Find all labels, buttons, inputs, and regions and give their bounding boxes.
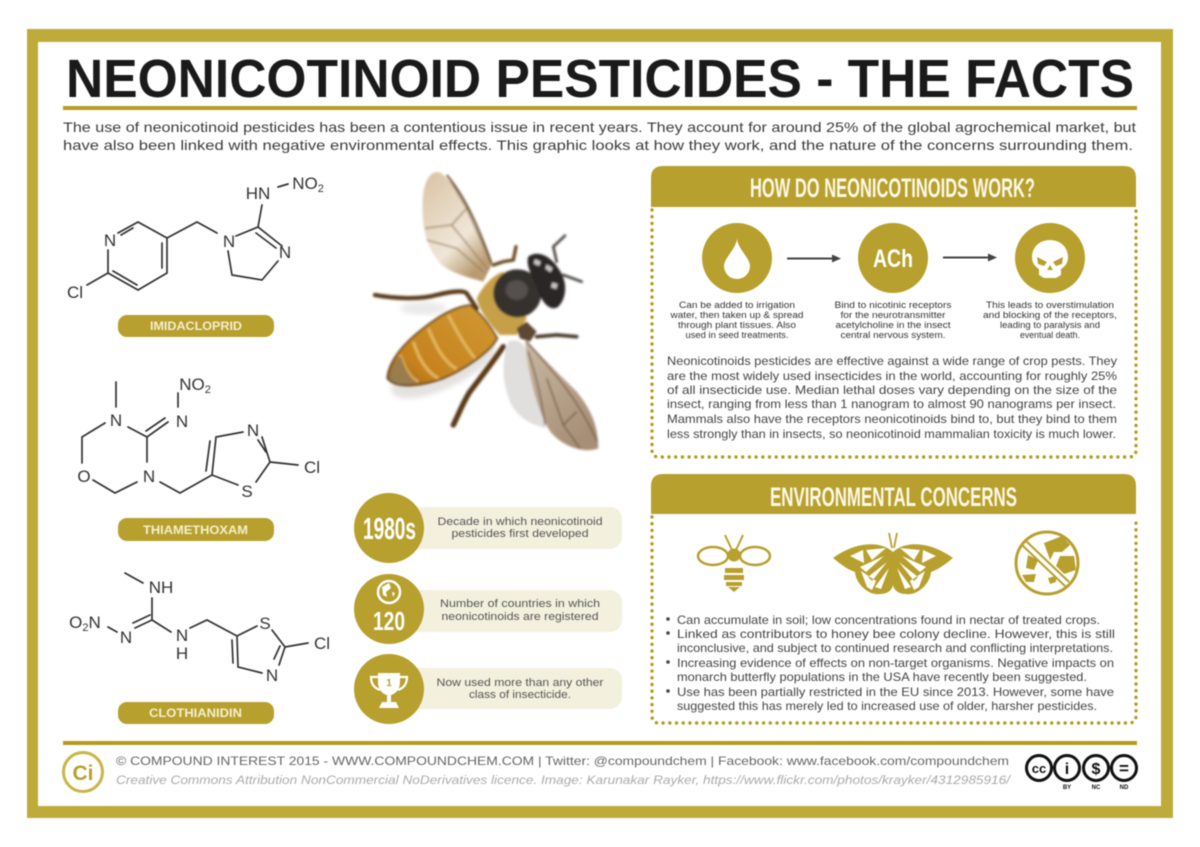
icon: skull [1015,223,1085,293]
logo: compound interest: Ci [72,762,94,785]
molecule: imidacloprid: NO [292,174,318,193]
creative commons icons: NC [1092,785,1101,791]
molecule: thiamethoxam: N [110,411,122,430]
stat: most used: class of insecticide. [469,689,571,701]
molecule: thiamethoxam: N [176,412,188,431]
bullet list: Can accumulate in soil; low concentrations found in nectar of treated crops. [677,613,1100,627]
footer credits: Creative Commons Attribution NonCommercial NoDerivatives licence. Image: Karunakar Rayker, https://www.flickr.com/photos/krayker/4312985916/ [116,773,1012,787]
molecule: imidacloprid: N [223,232,235,251]
molecule: thiamethoxam [77,375,320,501]
stat: 120 countries: Number of countries in which [440,598,600,610]
panel: environmental concerns [651,474,1136,723]
molecule: clothianidin: H [176,644,188,663]
caption 3: eventual death. [1020,330,1080,340]
arrow 2 [943,254,997,262]
stat: 120 countries [354,574,622,644]
molecule: clothianidin: N [266,666,278,685]
intro text: have also been linked with negative environmental effects. This graphic looks at how they work, and the nature of the concerns surrounding them. [63,137,1133,153]
arrow 1 [787,254,841,262]
stat: 1980s: pesticides first developed [452,528,588,540]
body paragraph: insect, ranging from less than 1 nanogram to almost 90 nanograms per insect. [667,397,1116,411]
bullet list: Increasing evidence of effects on non-target organisms. Negative impacts on [677,656,1114,670]
caption 3: and blocking of the receptors, [983,310,1117,320]
label: thiamethoxam [118,518,274,541]
molecule: imidacloprid: Cl [67,283,83,302]
body paragraph: Neonicotinoids pesticides are effective against a wide range of crop pests. They [667,354,1117,368]
bullet list: monarch butterfly populations in the USA have recently been suggested. [677,670,1087,684]
icon: ACh: ACh [873,245,913,273]
icon: water drop [702,223,772,293]
molecule: clothianidin: N [120,628,132,647]
molecule: clothianidin: N [89,613,101,632]
panel: how do neonicotinoids work [651,166,1136,457]
creative commons icons: $ [1092,761,1101,778]
panel header [651,166,1136,207]
panel header [651,474,1136,514]
label: clothianidin [118,702,274,724]
body paragraph: less strongly than in insects, so neonicotinoid mammalian toxicity is much lower. [667,427,1116,441]
molecule: thiamethoxam: 2 [205,384,211,396]
stat: most used: 1 [386,678,392,689]
footer rule [63,741,1137,745]
caption 1: Can be added to irrigation [679,300,795,310]
icon: globe prohibited [1016,532,1078,594]
creative commons icons [1026,756,1136,791]
bullet list: inconclusive, and subject to continued research and conflicting interpretations. [677,641,1113,655]
caption 3: leading to paralysis and [1000,320,1100,330]
creative commons icons: i [1065,761,1069,778]
molecule: clothianidin: 2 [82,622,89,634]
molecule: clothianidin: O [69,613,82,632]
footer credits [116,754,1012,787]
footer credits: © COMPOUND INTEREST 2015 - WWW.COMPOUNDCHEM.COM | Twitter: @compoundchem | Facebook: www.facebook.com/compoundchem [116,754,1009,768]
caption 2: acetylcholine in the insect [836,320,951,330]
body paragraph [667,354,1117,441]
logo: compound interest [64,752,102,792]
body paragraph: Mammals also have the receptors neonicotinoids bind to, but they bind to them [667,412,1117,426]
caption 2: Bind to nicotinic receptors [834,300,952,310]
molecule: clothianidin: S [259,614,271,633]
stat: most used: Now used more than any other [436,677,604,689]
molecule: imidacloprid: 2 [318,183,324,195]
molecule: clothianidin [69,573,330,685]
molecule: imidacloprid: N [279,243,291,262]
caption 2: for the neurotransmitter [840,310,946,320]
molecule: thiamethoxam: N [143,467,155,486]
molecule: imidacloprid [67,174,324,302]
creative commons icons: ND [1120,785,1129,791]
molecule: thiamethoxam: O [77,467,91,486]
molecule: thiamethoxam: NO [179,375,205,394]
bee photo [375,172,598,450]
bullet list: suggested this has merely led to increased use of older, harsher pesticides. [677,699,1097,713]
icon: butterfly [833,533,953,594]
stat: 120 countries: 120 [373,606,405,636]
stat: 120 countries: neonicotinoids are registered [442,611,598,623]
body paragraph: of all insecticide use. Median lethal doses vary depending on the size of the [667,383,1117,397]
caption 3: This leads to overstimulation [986,300,1114,310]
stat: 1980s: 1980s [363,511,416,546]
creative commons icons: BY [1063,785,1071,791]
stat: 1980s: Decade in which neonicotinoid [438,516,602,528]
panel heading: ENVIRONMENTAL CONCERNS [770,482,1017,512]
title rule [63,106,1137,110]
label: imidacloprid [118,315,274,337]
label: imidacloprid: IMIDACLOPRID [150,321,242,333]
stat: 1980s [354,493,622,563]
caption 1: water, then taken up & spread [669,310,804,320]
bullet list: Use has been partially restricted in the EU since 2013. However, some have [677,685,1114,699]
label: clothianidin: CLOTHIANIDIN [149,708,242,720]
bullet list [666,613,1115,713]
creative commons icons: = [1119,759,1129,778]
icon: bee [698,535,770,592]
molecule: clothianidin: NH [149,578,173,597]
stat: most used [354,654,622,724]
molecule: thiamethoxam: Cl [304,458,320,477]
body paragraph: are the most widely used insecticides in the world, accounting for roughly 25% [667,369,1117,383]
intro text [63,119,1136,153]
molecule: thiamethoxam: N [247,421,259,440]
caption 1: used in seed treatments. [686,330,788,340]
bullet list: Linked as contributors to honey bee colony decline. However, this is still [677,627,1115,641]
caption 1: through plant tissues. Also [678,320,796,330]
intro text: The use of neonicotinoid pesticides has been a contentious issue in recent years. They account for around 25% of the global agrochemical market, but [63,119,1136,135]
caption 2: central nervous system. [840,330,946,340]
icon: ACh [858,223,928,293]
label: thiamethoxam: THIAMETHOXAM [143,525,248,537]
creative commons icons: cc [1032,761,1046,776]
molecule: imidacloprid: N [104,231,116,250]
molecule: clothianidin: Cl [314,634,330,653]
title: NEONICOTINOID PESTICIDES - THE FACTS [66,49,1134,109]
molecule: thiamethoxam: S [241,482,253,501]
molecule: imidacloprid: HN [246,184,270,203]
molecule: clothianidin: N [176,626,188,645]
